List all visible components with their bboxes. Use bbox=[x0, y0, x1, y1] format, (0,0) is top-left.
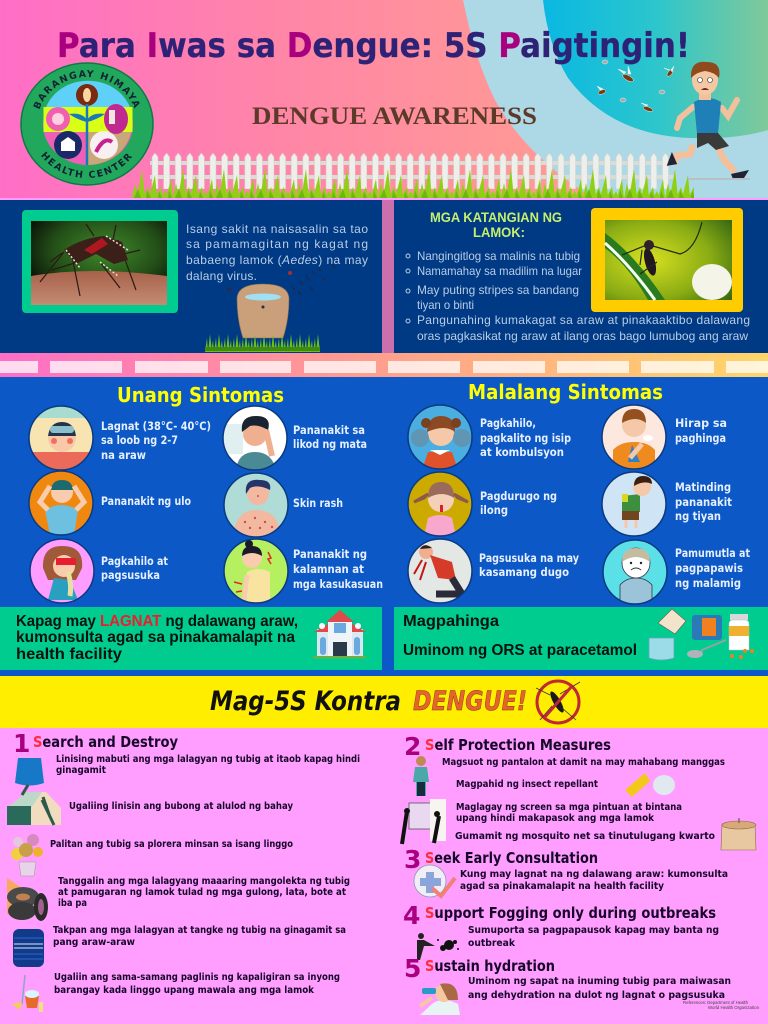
list: mosquito traits bbox=[406, 249, 750, 343]
icon: fever bbox=[29, 406, 93, 472]
section: step 2 self protection bbox=[402, 732, 756, 850]
heading: early symptoms: Unang Sintomas bbox=[117, 383, 284, 407]
text: abdominal pain bbox=[675, 480, 732, 523]
text: vase: Palitan ang tubig sa plorera minsan sa isang linggo bbox=[50, 839, 293, 850]
step heading: Self Protection Measures bbox=[425, 736, 611, 754]
heading: Mag-5S Kontra Dengue: DENGUE! bbox=[413, 686, 527, 717]
step heading: Sustain hydration bbox=[425, 957, 555, 975]
list: mosquito traits: tiyan o binti bbox=[417, 298, 474, 312]
section: step 3 early consultation bbox=[404, 845, 728, 897]
icon: window screen installers bbox=[402, 799, 446, 844]
icon: bucket bbox=[15, 758, 44, 786]
panel: header banner bbox=[0, 0, 768, 198]
text: consultation bbox=[460, 869, 728, 892]
list: mosquito traits: May puting stripes sa bandang bbox=[417, 283, 579, 297]
text: window screens: upang hindi makapasok ang mga lamok bbox=[456, 813, 654, 824]
text: tires: at pamugaran ng lamok tulad ng mga gulong, lata, bote at bbox=[58, 887, 346, 898]
text: fever: Lagnat (38°C- 40°C) bbox=[101, 419, 211, 433]
step number 1: 1 bbox=[13, 729, 30, 758]
text: eye pain: likod ng mata bbox=[293, 437, 367, 451]
text: fogging: Sumuporta sa pagpapausok kapag may banta ng bbox=[468, 925, 719, 936]
text: window screens: Maglagay ng screen sa mga pintuan at bintana bbox=[456, 802, 682, 813]
step number 2: 2 bbox=[404, 732, 421, 761]
text: confusion: Pagkahilo, bbox=[480, 416, 536, 430]
icon: nausea and vomiting bbox=[30, 539, 94, 603]
text: fever bbox=[101, 419, 211, 462]
icon: cleaning supplies bbox=[12, 975, 43, 1012]
icon: flower vase bbox=[11, 834, 43, 876]
title: Para Iwas sa Dengue: 5S Paigtingin! bbox=[57, 26, 690, 66]
text: fever: sa loob ng 2-7 bbox=[101, 433, 178, 447]
heading: mosquito traits: MGA KATANGIAN NG bbox=[430, 210, 562, 225]
list: mosquito traits: Pangunahing kumakagat sa araw at pinakaaktibo dalawang bbox=[417, 313, 750, 327]
text: confusion bbox=[480, 416, 571, 459]
text: difficulty breathing: Hirap sa bbox=[675, 416, 727, 430]
text: nosebleed bbox=[480, 489, 557, 517]
step number 5: 5 bbox=[404, 954, 421, 983]
icon: medical check bbox=[414, 865, 455, 897]
text: abdominal pain: ng tiyan bbox=[675, 509, 721, 523]
text: abdominal pain: pananakit bbox=[675, 495, 732, 509]
text: community cleanup bbox=[54, 972, 340, 996]
text: confusion: at kombulsyon bbox=[480, 445, 564, 459]
text: nausea: Pagkahilo at bbox=[101, 554, 168, 568]
text: vomiting blood: Pagsusuka na may bbox=[479, 551, 579, 565]
text: bucket: ginagamit bbox=[56, 765, 106, 776]
section: step 1 search and destroy bbox=[7, 729, 360, 1012]
panel: fever advice bbox=[0, 607, 382, 670]
heading: mosquito traits: LAMOK: bbox=[473, 225, 525, 240]
text: fogging: outbreak bbox=[468, 938, 515, 949]
icon: mosquito net bbox=[721, 818, 756, 850]
icon: pale and cold sweat bbox=[603, 540, 667, 610]
heading: mosquito traits bbox=[430, 210, 562, 240]
icon: running boy bbox=[669, 62, 750, 180]
heading: Mag-5S Kontra Dengue: Mag-5S Kontra bbox=[210, 686, 401, 717]
icon: abdominal pain bbox=[602, 472, 666, 536]
icon: picket fence and grass bbox=[132, 153, 694, 198]
icon: insect spray bbox=[625, 773, 675, 797]
definition text: sa pamamagitan ng kagat ng bbox=[186, 237, 368, 251]
text: headache: Pananakit ng ulo bbox=[101, 494, 191, 508]
section: step 5 hydration bbox=[404, 954, 731, 1015]
icon: skin rash bbox=[224, 473, 288, 540]
divider: section separator bbox=[382, 200, 394, 353]
icon: mosquitoes swarm bbox=[597, 60, 674, 113]
text: abdominal pain: Matinding bbox=[675, 480, 731, 494]
panel: fever advice: kumonsulta agad sa pinakamalapit na bbox=[16, 629, 295, 646]
icon: nosebleed bbox=[408, 472, 472, 536]
text: vomiting blood: kasamang dugo bbox=[479, 565, 569, 579]
text: eye pain: Pananakit sa bbox=[293, 423, 365, 437]
text: tires bbox=[58, 876, 350, 909]
text: repellant: Magpahid ng insect repellant bbox=[456, 779, 598, 790]
text: muscle pain bbox=[293, 547, 383, 591]
section: step 4 fogging bbox=[403, 901, 719, 960]
text: pale and cold sweat: pagpapawis bbox=[675, 561, 743, 575]
text: pale and cold sweat: ng malamig bbox=[675, 576, 741, 590]
icon: old tires bbox=[7, 878, 48, 921]
text: community cleanup: barangay kada linggo upang mawala ang mga lamok bbox=[54, 985, 314, 996]
text: mosquito net: Gumamit ng mosquito net sa tinutulugang kwarto bbox=[455, 831, 715, 842]
step heading: Support Fogging only during outbreaks bbox=[425, 904, 716, 922]
text: consultation: agad sa pinakamalapit na health facility bbox=[460, 881, 664, 892]
panel: treatment advice: Magpahinga bbox=[403, 613, 499, 630]
text: roof: Ugaliing linisin ang bubong at alulod ng bahay bbox=[69, 801, 293, 812]
icon: headache bbox=[29, 471, 93, 535]
text: nausea bbox=[101, 554, 168, 582]
text: window screens bbox=[456, 802, 682, 824]
text: hydration: ang dehydration na dulot ng lagnat o pagsusuka bbox=[468, 990, 725, 1001]
icon: person drinking bbox=[420, 983, 460, 1015]
text: vomiting blood bbox=[479, 551, 579, 579]
text: fogging bbox=[468, 925, 719, 949]
text: muscle pain: Pananakit ng bbox=[293, 547, 367, 561]
panel: treatment advice: Uminom ng ORS at paracetamol bbox=[403, 642, 637, 659]
icon: muscle pain bbox=[224, 539, 288, 606]
text: tank bbox=[53, 925, 346, 948]
text: nosebleed: ilong bbox=[480, 503, 508, 517]
text: bucket: Linising mabuti ang mga lalagyan ng tubig at itaob kapag hindi bbox=[56, 754, 360, 765]
text: fever: na araw bbox=[101, 448, 146, 462]
text: bucket bbox=[56, 754, 360, 776]
text: hydration bbox=[468, 976, 731, 1001]
definition text: babaeng lamok (Aedes) na may bbox=[186, 253, 368, 267]
icon: health center logo bbox=[20, 62, 154, 186]
text: tires: Tanggalin ang mga lalagyang maaaring mangolekta ng tubig bbox=[58, 876, 350, 887]
icon: confusion bbox=[408, 405, 472, 470]
text: hydration: Uminom ng sapat na inuming tubig para maiwasan bbox=[468, 976, 731, 987]
heading: severe symptoms: Malalang Sintomas bbox=[468, 380, 663, 404]
text: nosebleed: Pagdurugo ng bbox=[480, 489, 557, 503]
text: skin rash: Skin rash bbox=[293, 496, 343, 510]
step heading: Seek Early Consultation bbox=[425, 849, 598, 867]
step number 3: 3 bbox=[404, 845, 421, 874]
text: pale and cold sweat bbox=[675, 546, 750, 590]
panel: decorative striped band bbox=[0, 353, 768, 377]
icon: cleaning the roof bbox=[7, 785, 61, 825]
step heading: Search and Destroy bbox=[33, 733, 178, 751]
list: mosquito traits: Namamahay sa madilim na lugar bbox=[417, 264, 582, 278]
icon: health center logo: BARANGAY HIMAYA bbox=[33, 70, 140, 109]
text: consultation: Kung may lagnat na ng dalawang araw: kumonsulta bbox=[460, 869, 728, 880]
text: confusion: pagkalito ng isip bbox=[480, 431, 571, 445]
text: difficulty breathing: paghinga bbox=[675, 431, 726, 445]
icon: no mosquito bbox=[536, 681, 580, 723]
text: tires: iba pa bbox=[58, 898, 87, 909]
panel: dengue definition bbox=[0, 200, 382, 353]
icon: vomiting blood bbox=[408, 539, 472, 603]
text: long clothes: Magsuot ng pantalon at damit na may mahabang manggas bbox=[442, 757, 725, 768]
text: references: World Health Organization bbox=[708, 1005, 759, 1010]
panel: symptoms background bbox=[0, 377, 768, 676]
panel: fever advice: Kapag may LAGNAT ng dalawang araw, bbox=[16, 613, 298, 630]
icon: ORS and medicine bbox=[649, 609, 754, 660]
icon: hospital bbox=[313, 610, 366, 658]
definition text: Isang sakit na naisasalin sa tao bbox=[186, 222, 368, 236]
icon: health center logo: HEALTH CENTER bbox=[41, 152, 132, 178]
text: tank: Takpan ang mga lalagyan at tangke ng tubig na ginagamit sa bbox=[53, 925, 346, 936]
step number 4: 4 bbox=[403, 901, 420, 930]
definition text bbox=[186, 222, 368, 283]
panel: 5S banner bbox=[0, 676, 768, 728]
icon: water tank bbox=[13, 929, 44, 967]
definition text: dalang virus. bbox=[186, 269, 257, 283]
icon: person in long clothes bbox=[413, 756, 429, 796]
panel: fever advice: health facility bbox=[16, 646, 122, 663]
mosquito photo with green frame bbox=[22, 210, 178, 313]
subtitle: DENGUE AWARENESS bbox=[252, 103, 537, 130]
list: mosquito traits: Nangingitlog sa malinis na tubig bbox=[417, 249, 580, 263]
icon: barrel with mosquitoes on grass bbox=[205, 264, 335, 352]
list: mosquito traits: oras pagkasikat ng araw at ilang oras bago lumubog ang araw bbox=[417, 329, 748, 343]
icon: fogging man bbox=[417, 933, 459, 960]
text: difficulty breathing bbox=[675, 416, 727, 445]
text: muscle pain: kalamnan at bbox=[293, 562, 364, 576]
text: community cleanup: Ugaliin ang sama-samang paglinis ng kapaligiran sa inyong bbox=[54, 972, 340, 983]
icon: difficulty breathing bbox=[602, 405, 666, 470]
text: nausea: pagsusuka bbox=[101, 568, 160, 582]
text: references: References: Department of Health bbox=[683, 1000, 748, 1005]
text: pale and cold sweat: Pamumutla at bbox=[675, 546, 750, 560]
text: muscle pain: mga kasukasuan bbox=[293, 577, 383, 591]
photo: mosquito on leaf with yellow frame bbox=[591, 208, 743, 312]
icon: eye pain bbox=[223, 406, 287, 470]
panel: mosquito characteristics bbox=[394, 200, 768, 353]
text: references bbox=[683, 1000, 759, 1010]
text: eye pain bbox=[293, 423, 367, 451]
text: tank: pang araw-araw bbox=[53, 937, 135, 948]
panel: treatment advice bbox=[394, 607, 768, 670]
